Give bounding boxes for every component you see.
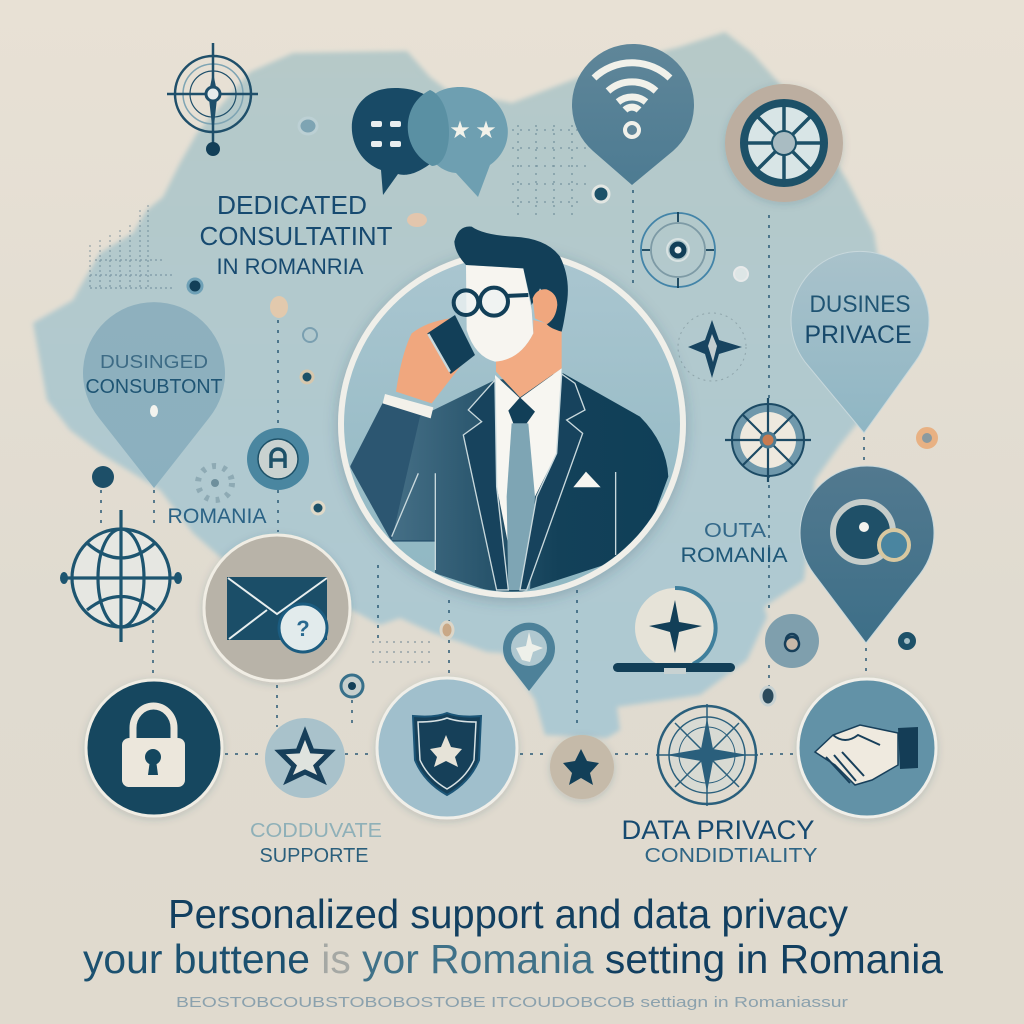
pin: business consultant — [83, 302, 225, 488]
text: dedicated consultant — [200, 190, 393, 279]
icon: compass star — [678, 313, 746, 381]
icon: compass circle — [656, 704, 758, 806]
pin: business consultant: CONSUBTONT — [86, 376, 222, 398]
badge: padlock — [86, 680, 222, 816]
seams — [392, 472, 616, 570]
dot grid: top — [512, 125, 590, 215]
badge: envelope: ? — [296, 616, 310, 641]
text: dedicated consultant: CONSULTATINT — [200, 221, 393, 251]
badge: small lock right — [765, 614, 819, 668]
ear — [533, 289, 557, 324]
neck — [496, 320, 562, 397]
text: data privacy: CONDIDTIALITY — [644, 845, 818, 867]
small pin — [503, 623, 555, 691]
tie knot — [508, 397, 535, 423]
pin: business consultant: DUSINGED — [100, 352, 208, 372]
icon: wheel right — [725, 398, 811, 482]
text: corporate support: SUPPORTE — [260, 845, 368, 867]
icon: target right of top — [641, 212, 715, 288]
text: corporate support — [250, 820, 382, 867]
badge: envelope — [204, 535, 350, 681]
cuff — [383, 394, 433, 418]
title: BEOSTOBCOUBSTOBOBOSTOBE ITCOUDOBCOB settiagn in Romaniassur — [176, 994, 848, 1011]
pin: gear ring right — [800, 466, 934, 643]
text: dedicated consultant: DEDICATED — [217, 190, 367, 220]
badge: handshake — [798, 679, 936, 817]
dot — [92, 466, 114, 488]
text: outa romania — [680, 520, 788, 567]
icon: gear — [198, 466, 232, 500]
glasses — [454, 288, 528, 316]
badge: shield — [377, 678, 517, 818]
text: corporate support: CODDUVATE — [250, 820, 382, 842]
man figure — [350, 227, 668, 597]
map of Romania — [33, 32, 885, 738]
dot grid: left — [90, 205, 175, 290]
small target icons scattered — [188, 118, 935, 705]
hair — [454, 227, 568, 332]
icon: globe — [60, 510, 182, 642]
pin: business privacy — [791, 251, 929, 433]
icon: chat bubbles: ★ — [449, 117, 471, 144]
text: outa romania: ROMANIA — [680, 544, 788, 567]
title: Personalized support and data privacy — [168, 891, 848, 937]
pocket square — [573, 472, 601, 487]
badge: star — [265, 718, 345, 798]
text: dedicated consultant: IN ROMANRIA — [216, 254, 364, 279]
text: outa romania: OUTA — [704, 520, 767, 542]
lapels — [463, 380, 508, 590]
badge: dark star — [550, 735, 614, 799]
icon: compass badge — [613, 588, 735, 674]
icon: chat bubbles: ★ — [475, 117, 497, 144]
badge: small lock circle — [247, 428, 309, 490]
icon: chat bubbles — [352, 87, 508, 197]
tie — [507, 423, 535, 590]
title: your buttene is yor Romania setting in Romania — [83, 936, 943, 982]
text: data privacy: DATA PRIVACY — [622, 815, 814, 845]
connector lines — [101, 190, 866, 754]
hand — [396, 318, 470, 403]
icon: wheel badge top right — [725, 84, 843, 202]
text: romania: ROMANIA — [168, 505, 266, 528]
pin: business privacy: PRIVACE — [804, 321, 912, 349]
title — [83, 891, 943, 1011]
icon: wifi pin — [572, 44, 694, 185]
main circle with man — [341, 227, 683, 597]
icon: crosshair top left — [167, 43, 258, 156]
text: data privacy — [622, 815, 818, 867]
face — [466, 265, 533, 362]
dot grid: lower — [372, 642, 430, 662]
shirt — [495, 368, 562, 553]
phone — [427, 315, 475, 374]
pin: business privacy: DUSINES — [810, 291, 910, 318]
